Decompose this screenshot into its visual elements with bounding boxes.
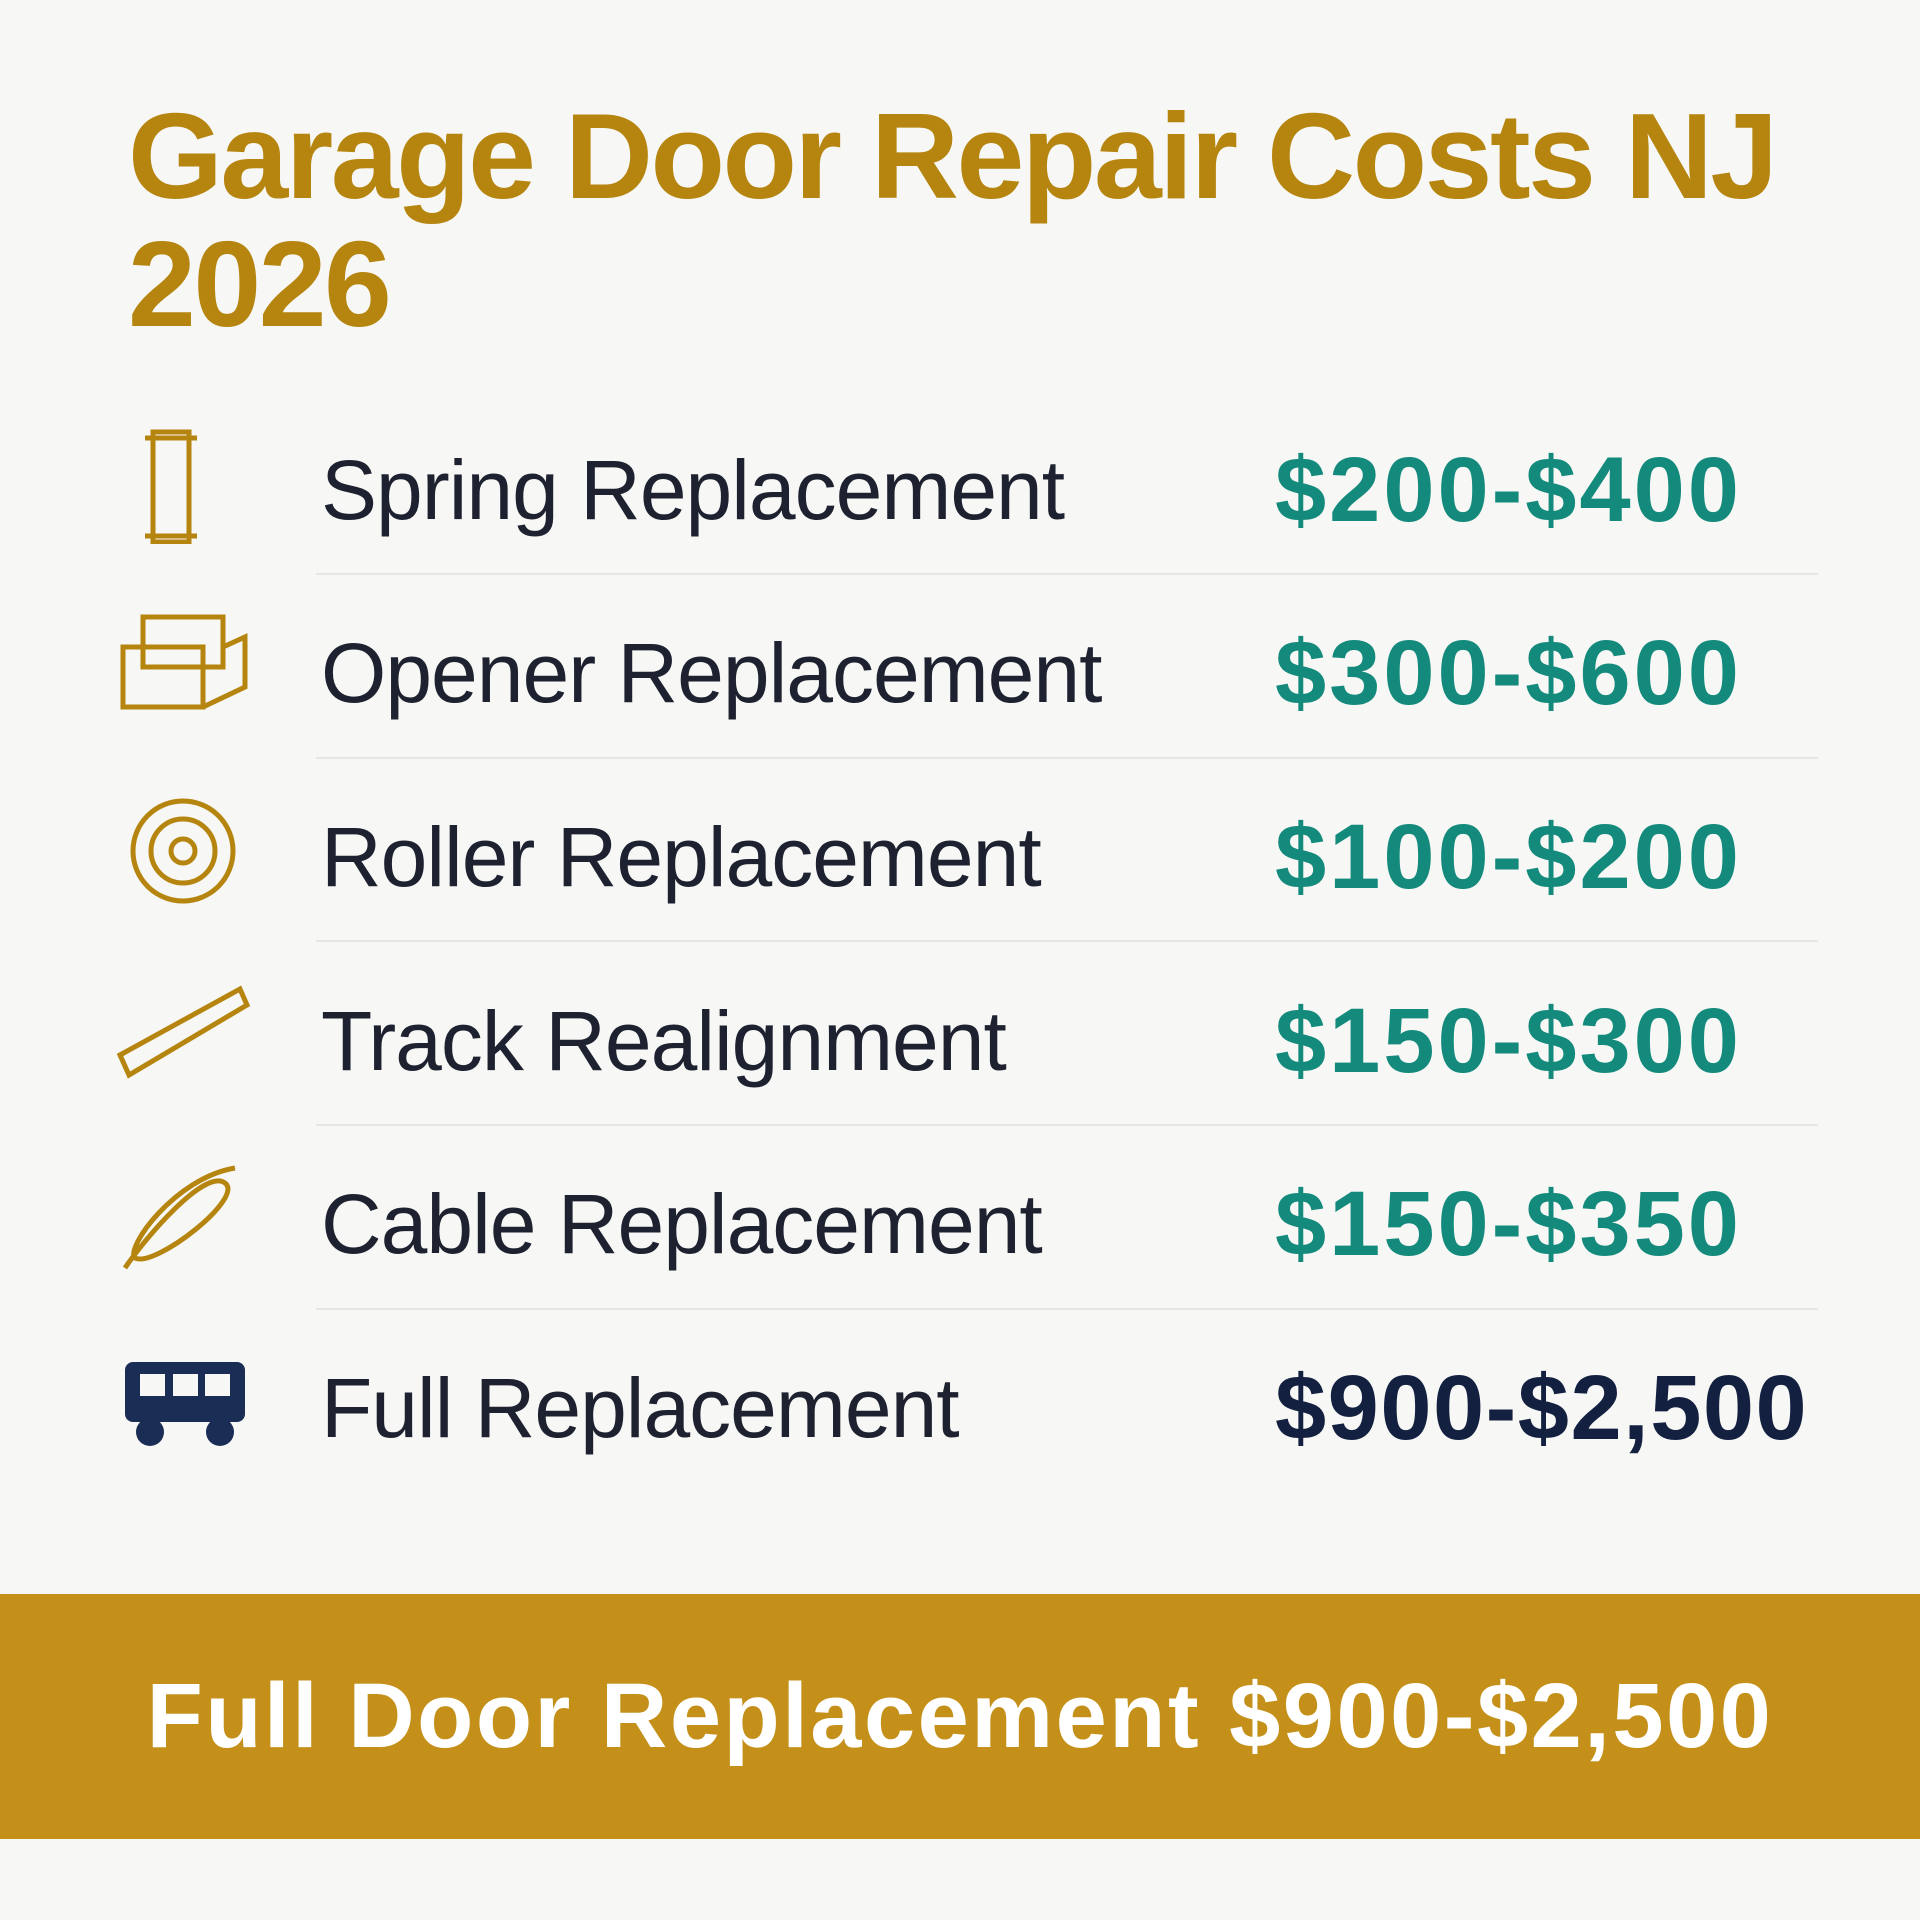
row: cable: $150-$350 bbox=[1275, 1173, 1742, 1275]
row: full: Full Replacement bbox=[321, 1361, 959, 1455]
row: roller bbox=[130, 798, 1742, 908]
title: 2026 bbox=[128, 216, 389, 352]
row: spring: $200-$400 bbox=[1275, 439, 1742, 541]
row: roller: $100-$200 bbox=[1275, 806, 1742, 908]
icon: opener bbox=[120, 614, 248, 710]
row: track bbox=[116, 986, 1742, 1092]
row: spring bbox=[145, 430, 1742, 544]
banner: Full Door Replacement $900-$2,500 bbox=[147, 1665, 1773, 1767]
icon: cable bbox=[123, 1166, 236, 1270]
icon: roller bbox=[130, 798, 236, 904]
title bbox=[128, 88, 1776, 352]
row: track: $150-$300 bbox=[1275, 990, 1742, 1092]
icon: vehicle bbox=[125, 1362, 245, 1446]
row: roller: Roller Replacement bbox=[321, 810, 1041, 904]
row: cable: Cable Replacement bbox=[321, 1177, 1042, 1271]
row: full: $900-$2,500 bbox=[1275, 1357, 1808, 1459]
banner bbox=[0, 1594, 1920, 1839]
title: Garage Door Repair Costs NJ bbox=[128, 88, 1776, 224]
row: opener: $300-$600 bbox=[1275, 622, 1742, 724]
row: full bbox=[125, 1357, 1808, 1459]
row: track: Track Realignment bbox=[321, 994, 1006, 1088]
row: opener: Opener Replacement bbox=[321, 626, 1101, 720]
row: opener bbox=[120, 614, 1742, 724]
row: cable bbox=[123, 1166, 1742, 1275]
icon: track bbox=[116, 986, 250, 1079]
row: spring: Spring Replacement bbox=[321, 443, 1064, 537]
icon: spring bbox=[145, 430, 197, 544]
